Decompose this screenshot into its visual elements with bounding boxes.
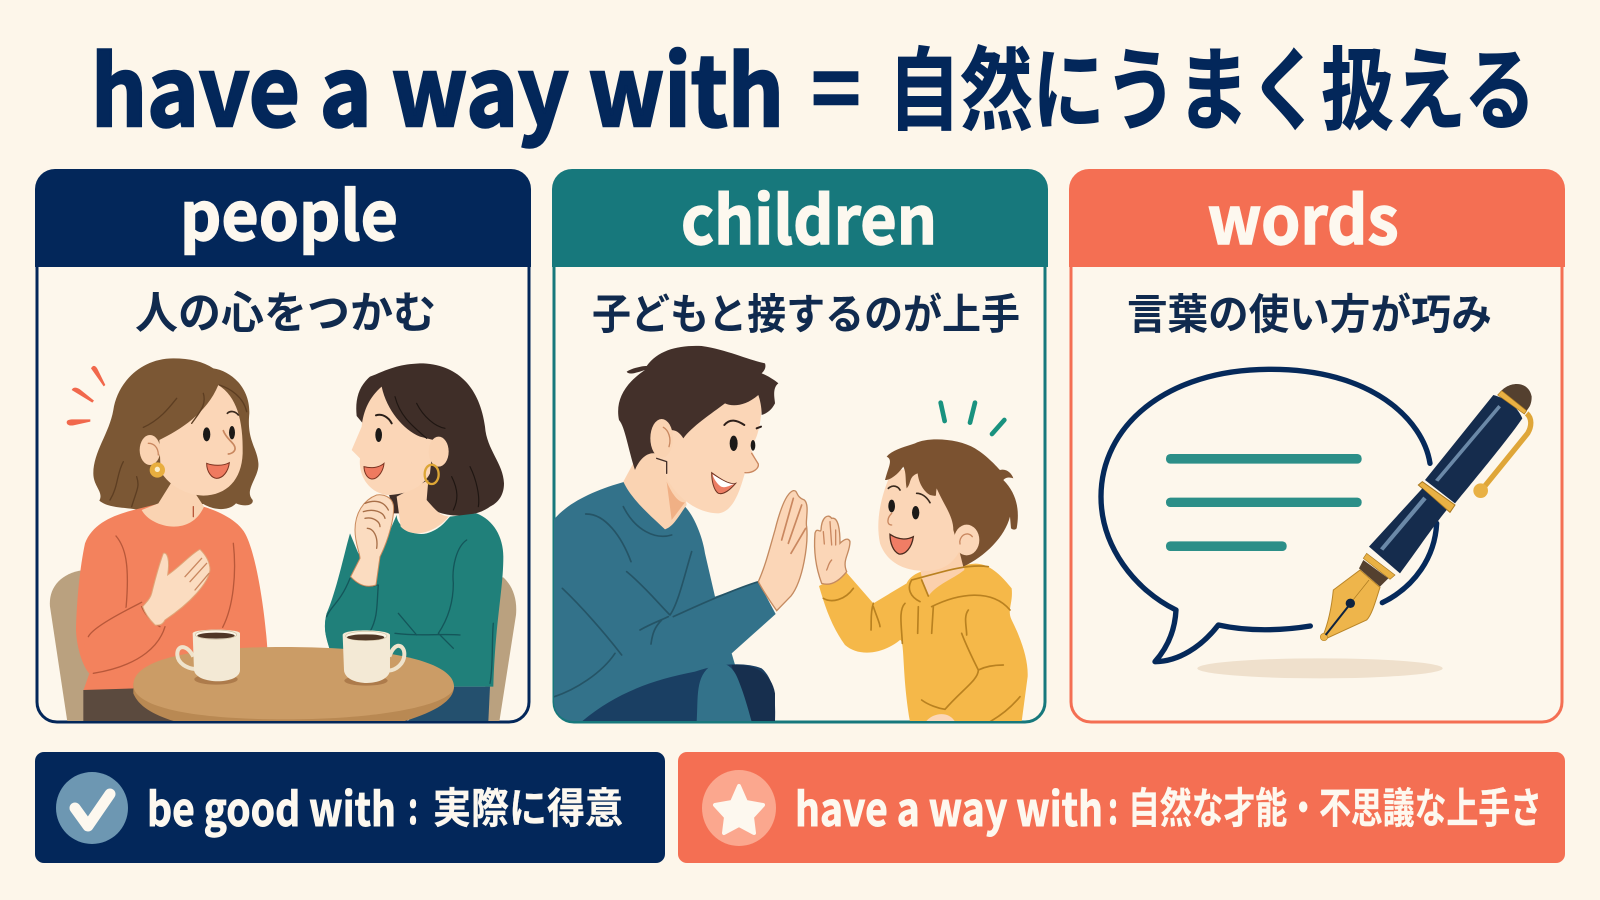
icon: fountain pen: [1320, 384, 1532, 641]
header: children: [552, 168, 1048, 267]
illustration: two women talking over coffee: [50, 358, 516, 727]
text: be good with: [147, 773, 623, 840]
subheading: words: 言葉の使い方が巧み: [1127, 281, 1492, 342]
subheading: people: 人の心をつかむ: [135, 277, 436, 341]
panel: children: [552, 168, 1048, 722]
bar: have a way with: [678, 752, 1565, 863]
bar: be good with: [35, 752, 665, 863]
man: [552, 346, 807, 722]
icon: speech bubble: [1101, 369, 1437, 662]
header: words: [1069, 168, 1565, 267]
title: have a way with: [91, 15, 784, 154]
shadow: [1197, 658, 1443, 678]
text: be good with: be good with: [147, 774, 396, 840]
chairs: [50, 570, 516, 722]
header: people: [35, 163, 531, 267]
title: =: [811, 18, 861, 148]
text: have a way with: have a way with: [795, 774, 1103, 840]
text: have a way with: [795, 773, 1542, 840]
woman left: [76, 358, 267, 722]
text: be good with: :: [408, 773, 418, 837]
text: have a way with: :: [1108, 773, 1118, 837]
header: children: children: [681, 168, 937, 264]
header: words: words: [1208, 168, 1398, 264]
woman right: [325, 363, 504, 722]
coffee cup right: [343, 630, 404, 686]
icon: excitement marks: [67, 366, 105, 426]
text lines: [1166, 454, 1362, 551]
coffee cup left: [177, 630, 240, 685]
table: [133, 647, 454, 727]
icon: star badge: [702, 770, 776, 846]
text: be good with: 実際に得意: [433, 775, 623, 836]
subheading: children: 子どもと接するのが上手: [592, 281, 1020, 342]
panel: people: [35, 163, 531, 727]
illustration: speech bubble and fountain pen: [1101, 369, 1532, 678]
header: people: people: [180, 163, 398, 260]
illustration: father and child high five: [552, 346, 1028, 722]
title: [91, 15, 1536, 154]
icon: check badge: [56, 772, 128, 844]
panel: words: [1069, 168, 1565, 722]
boy: [815, 439, 1028, 722]
icon: excitement marks: [941, 403, 1004, 434]
